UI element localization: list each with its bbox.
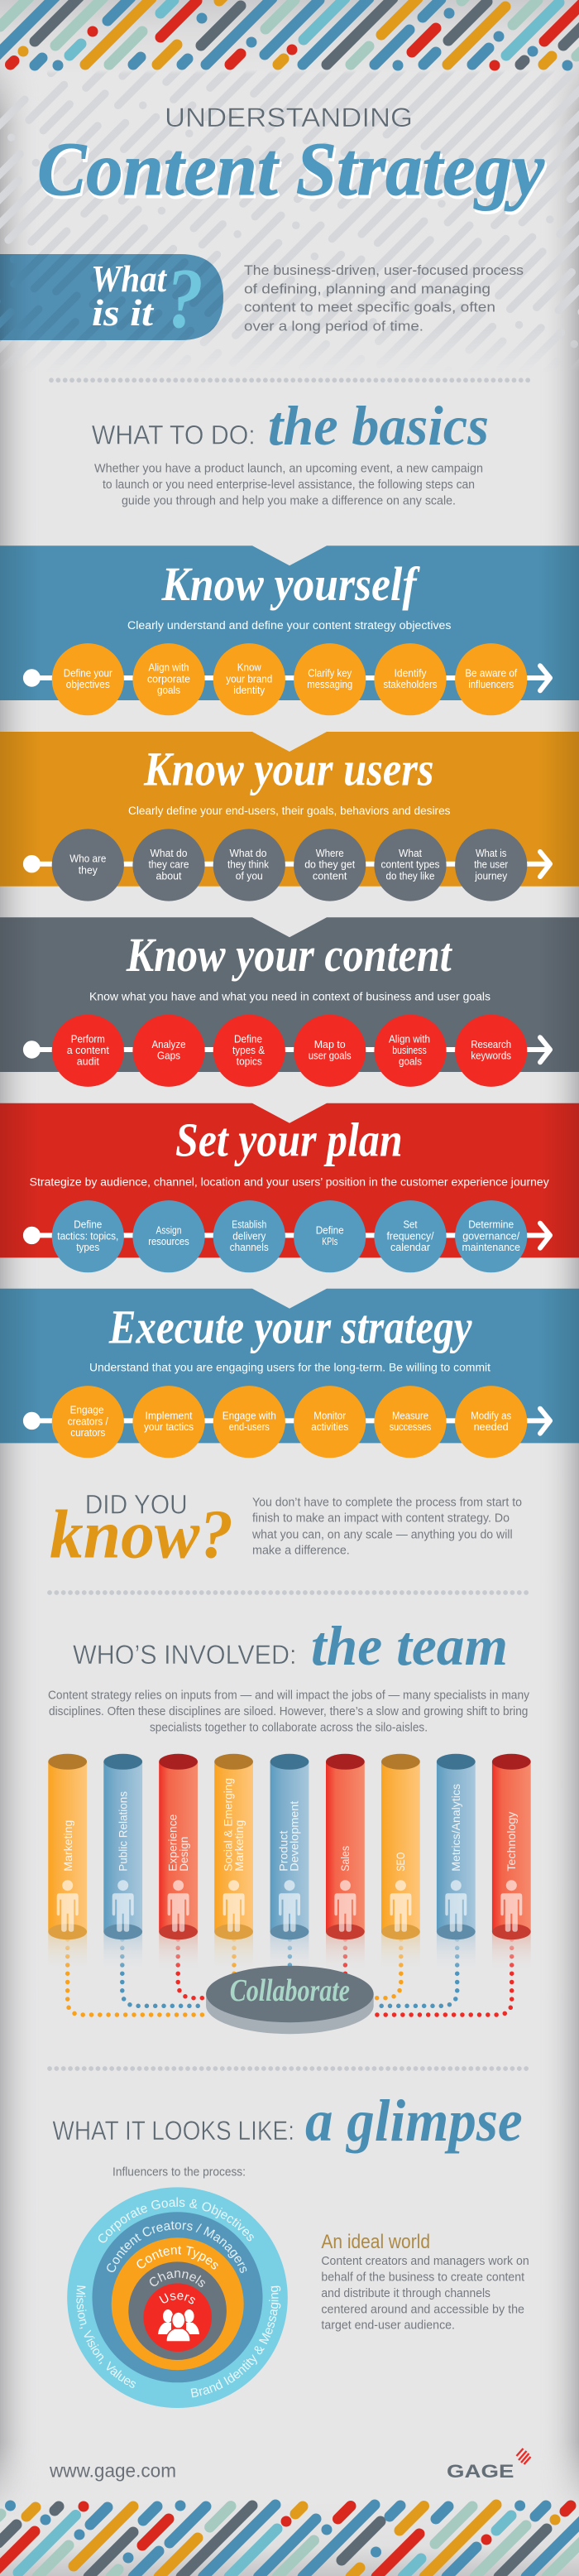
step: who are they: they: [79, 864, 98, 876]
collaborate disc: Collaborate: [230, 1973, 350, 2008]
step: where do they get content: do they get: [304, 859, 356, 871]
step: define KPIs: KPIs: [322, 1236, 337, 1247]
logo: gage: [447, 2449, 531, 2482]
step: define types and topics: [213, 1015, 285, 1087]
step: what is the user journey: What is: [476, 848, 506, 859]
ideal world text: Content creators and managers work on: [321, 2254, 529, 2268]
step: monitor activities: [294, 1386, 366, 1458]
band background: [0, 732, 579, 887]
step: what is the user journey: journey: [474, 870, 508, 882]
step: define your objectives: objectives: [66, 679, 110, 690]
icon: users: [158, 2309, 199, 2342]
title: Understanding: UNDERSTANDING: [165, 103, 413, 132]
step: analyze gaps: Gaps: [157, 1050, 180, 1062]
subheading: Know what you have and what you need in context of business and user goals: [89, 990, 490, 1002]
ideal world text: and distribute it through channels: [321, 2286, 490, 2300]
step: know your brand identity: [213, 643, 285, 715]
silo: product development: Development: [288, 1801, 301, 1872]
step: define your objectives: [52, 643, 124, 715]
band background: [0, 917, 579, 1072]
definition text: The business-driven, user-focused process: [244, 263, 524, 278]
ring label: corporate goals and objectives: Corporate Goals & Objectives: [98, 2197, 254, 2243]
step: establish delivery channels: [213, 1200, 285, 1272]
step: what do they think of you: they think: [227, 859, 270, 871]
subheading: Strategize by audience, channel, location and your users’ position in the customer experience journey: [30, 1176, 549, 1189]
silo: product development: Product: [276, 1831, 290, 1872]
step: clarify key messaging: Clarify key: [308, 667, 352, 679]
heading: what it looks like, a glimpse: a glimpse: [305, 2088, 523, 2154]
logo: gage: GAGE: [447, 2461, 514, 2482]
step: modify as needed: needed: [474, 1421, 509, 1433]
step: engage with end-users: [213, 1386, 285, 1458]
step: set frequency calendar: [374, 1200, 447, 1272]
heading: what it looks like, a glimpse: [52, 2088, 523, 2154]
ring label: mission, vision, values: Mission, Vision, Values: [76, 2285, 136, 2388]
step: perform a content audit: Perform: [71, 1033, 105, 1045]
silo: social and emerging marketing: Marketing: [232, 1820, 246, 1872]
ideal world text: target end-user audience.: [321, 2319, 455, 2333]
step: define KPIs: [294, 1200, 366, 1272]
step: research keywords: [455, 1015, 527, 1087]
step: what content types do they like: What: [399, 848, 422, 859]
step: define your objectives: Define your: [64, 667, 112, 679]
silo: public relations: [103, 1754, 142, 1973]
definition text: content to meet specific goals, often: [244, 300, 495, 315]
step: where do they get content: [294, 829, 366, 901]
step: identify stakeholders: stakeholders: [384, 679, 437, 690]
panel: know yourself: [0, 545, 579, 715]
step: align with corporate goals: [132, 643, 205, 715]
timeline arrow: [26, 1037, 550, 1062]
step: what content types do they like: do they like: [385, 870, 435, 882]
step: set frequency calendar: calendar: [390, 1242, 430, 1253]
step: implement your tactics: Implement: [146, 1410, 193, 1421]
team paragraph: [48, 1689, 529, 1735]
step: know your brand identity: Know: [237, 662, 262, 674]
heading: what to do, the basics: the basics: [268, 394, 489, 457]
silo: SEO: [381, 1754, 420, 1973]
timeline arrow: [26, 852, 550, 877]
step: be aware of influencers: Be aware of: [465, 667, 518, 679]
silo: marketing: Marketing: [61, 1820, 74, 1872]
step: engage creators curators: curators: [70, 1427, 105, 1439]
heading: who's involved, the team: [73, 1614, 508, 1677]
step: clarify key messaging: messaging: [307, 679, 352, 690]
step: map to user goals: user goals: [309, 1050, 352, 1062]
step: align with corporate goals: Align with: [149, 662, 189, 674]
step: identify stakeholders: [374, 643, 447, 715]
step: what do they think of you: of you: [236, 870, 263, 882]
step: perform a content audit: audit: [77, 1056, 99, 1068]
intro paragraph: guide you through and help you make a difference on any scale.: [122, 494, 456, 507]
influencers label: Influencers to the process:: [112, 2165, 246, 2179]
step: align with corporate goals: corporate: [147, 673, 190, 685]
step: who are they: Who are: [69, 853, 106, 865]
connector: dotted paths to collaborate: [68, 1939, 512, 2015]
ideal world heading: An ideal world: [321, 2231, 430, 2253]
heading: what it looks like, a glimpse: WHAT IT LOOKS LIKE:: [52, 2116, 294, 2146]
heading: who's involved, the team: the team: [311, 1614, 508, 1677]
silo: marketing: [48, 1754, 87, 1973]
title: Content Strategy: Content Strategy: [37, 127, 545, 211]
step: what do they care about: What do: [151, 848, 188, 859]
step: define tactics: Define: [74, 1219, 102, 1231]
step: what content types do they like: [374, 829, 447, 901]
step: modify as needed: Modify as: [471, 1410, 511, 1421]
step: define tactics: [52, 1200, 124, 1272]
step: align with corporate goals: goals: [157, 685, 180, 696]
step: assign resources: [132, 1200, 205, 1272]
step: modify as needed: [455, 1386, 527, 1458]
step: where do they get content: Where: [316, 848, 344, 859]
silo: experience design: Experience: [165, 1814, 179, 1872]
intro paragraph: [94, 463, 483, 507]
panel: what is it: [0, 251, 524, 346]
heading: Execute your strategy: [108, 1300, 472, 1354]
did you know heading: know?: [50, 1497, 233, 1574]
step: align with business goals: goals: [399, 1056, 422, 1068]
step: define tactics: types: [76, 1242, 99, 1253]
panel: set your plan: [0, 1103, 579, 1272]
step: research keywords: keywords: [471, 1050, 511, 1062]
timeline arrow: [26, 666, 550, 690]
did you know heading: DID YOU: [85, 1489, 188, 1519]
step: establish delivery channels: channels: [230, 1242, 269, 1253]
footer url: www.gage.com: [49, 2460, 176, 2482]
panel: know your content: [0, 917, 579, 1087]
heading: what to do, the basics: [92, 394, 489, 457]
definition text: of defining, planning and managing: [244, 281, 490, 296]
step: define tactics: tactics: topics,: [57, 1230, 118, 1242]
chart: silo cylinders and collaborate connections: [48, 1754, 531, 2034]
ring label: channels: Channels: [149, 2271, 205, 2287]
silo: experience design: Design: [177, 1837, 190, 1872]
step: what is the user journey: [455, 829, 527, 901]
step: perform a content audit: a content: [67, 1045, 109, 1056]
title: Content Strategy: Content Strategy: [39, 129, 547, 214]
silo: social and emerging marketing: [214, 1754, 253, 1973]
step: what do they think of you: [213, 829, 285, 901]
step: research keywords: Research: [471, 1039, 511, 1050]
step: define KPIs: Define: [316, 1224, 344, 1236]
heading: Know yourself: [161, 557, 421, 611]
ring label: brand identity and messaging: Brand Identity & Messaging: [190, 2286, 281, 2397]
team paragraph: specialists together to collaborate across the silo-aisles.: [150, 1721, 428, 1735]
step: clarify key messaging: [294, 643, 366, 715]
ring label: users: Users: [159, 2293, 195, 2304]
what is it badge: [0, 254, 223, 340]
step: set frequency calendar: frequency/: [387, 1230, 434, 1242]
did you know text: You don’t have to complete the process from start to: [252, 1495, 522, 1509]
ring label: content types: Content Types: [136, 2246, 218, 2270]
step: determine governance maintenance: maintenance: [462, 1242, 520, 1253]
panel: know your users: [0, 732, 579, 901]
top stripes decoration: [0, 0, 579, 65]
step: measure successes: successes: [390, 1421, 431, 1433]
ideal world text: behalf of the business to create content: [321, 2270, 525, 2284]
step: what is the user journey: the user: [474, 859, 508, 871]
step: map to user goals: Map to: [314, 1039, 346, 1050]
step: determine governance maintenance: Determine: [468, 1219, 514, 1231]
step: define types and topics: topics: [237, 1056, 262, 1068]
chart: concentric influencer rings: [67, 2187, 288, 2408]
silo: technology: [492, 1754, 531, 1973]
step: be aware of influencers: [455, 643, 527, 715]
ring label: content creators and managers: Content Creators / Managers: [107, 2221, 246, 2273]
subheading: Understand that you are engaging users for the long-term. Be willing to commit: [89, 1362, 490, 1374]
did you know text: finish to make an impact with content strategy. Do: [252, 1511, 510, 1526]
heading: Know your users: [143, 742, 433, 796]
step: where do they get content: content: [313, 870, 347, 882]
step: what do they care about: about: [156, 870, 182, 882]
team paragraph: Content strategy relies on inputs from — and will impact the jobs of — many specialists in many: [48, 1689, 529, 1703]
step: define types and topics: types &: [232, 1045, 266, 1056]
what is it label: is it: [92, 291, 154, 334]
step: set frequency calendar: Set: [404, 1219, 418, 1231]
timeline arrow: [26, 1409, 550, 1434]
heading: Set your plan: [175, 1113, 403, 1167]
step: who are they: [52, 829, 124, 901]
heading: what to do, the basics: WHAT TO DO:: [92, 421, 256, 450]
step: engage creators curators: [52, 1386, 124, 1458]
step: engage with end-users: Engage with: [223, 1410, 276, 1421]
silo: sales: Sales: [338, 1846, 352, 1872]
team paragraph: disciplines. Often these disciplines are siloed. However, there’s a slow and growing shift to bring: [49, 1704, 528, 1718]
heading: Know your content: [126, 928, 452, 982]
step: establish delivery channels: Establish: [232, 1219, 266, 1231]
step: engage creators curators: Engage: [69, 1405, 104, 1416]
did you know text: what you can, on any scale — anything you do will: [251, 1527, 513, 1541]
step: implement your tactics: your tactics: [144, 1421, 194, 1433]
silo: metrics and analytics: [437, 1754, 476, 1973]
step: align with business goals: business: [392, 1045, 427, 1056]
silo: technology: Technology: [505, 1812, 518, 1872]
step: establish delivery channels: delivery: [232, 1230, 266, 1242]
heading: who's involved, the team: WHO’S INVOLVED:: [73, 1640, 296, 1670]
step: measure successes: Measure: [392, 1410, 428, 1421]
step: know your brand identity: identity: [233, 685, 266, 696]
step: perform a content audit: [52, 1015, 124, 1087]
silo: SEO: SEO: [394, 1853, 407, 1872]
step: what content types do they like: content types: [380, 859, 440, 871]
background pattern of pale diagonal stripes: [0, 72, 579, 361]
ideal world text: [321, 2254, 529, 2333]
band background: [0, 1103, 579, 1257]
panel: execute your strategy: [0, 1289, 579, 1458]
step: identify stakeholders: Identify: [394, 667, 427, 679]
step: be aware of influencers: influencers: [468, 679, 514, 690]
step: what do they think of you: What do: [230, 848, 267, 859]
step: map to user goals: [294, 1015, 366, 1087]
step: what do they care about: they care: [149, 859, 189, 871]
panel: did you know: [50, 1489, 522, 1574]
step: engage with end-users: end-users: [229, 1421, 270, 1433]
panel: an ideal world: [321, 2231, 529, 2333]
silo: product development: [270, 1754, 309, 1973]
step: assign resources: resources: [148, 1236, 189, 1247]
step: monitor activities: Monitor: [313, 1410, 346, 1421]
silo: public relations: Public Relations: [116, 1791, 129, 1872]
intro paragraph: Whether you have a product launch, an upcoming event, a new campaign: [94, 463, 483, 476]
timeline arrow: [26, 1223, 550, 1248]
silo: social and emerging marketing: Social & Emerging: [221, 1778, 234, 1872]
question mark: ?: [166, 251, 203, 346]
silo: sales: [326, 1754, 365, 1973]
intro paragraph: to launch or you need enterprise-level assistance, the following steps can: [103, 478, 475, 492]
definition text: [244, 263, 524, 334]
step: what do they care about: [132, 829, 205, 901]
step: engage creators curators: creators /: [68, 1415, 108, 1427]
step: analyze gaps: Analyze: [152, 1039, 186, 1050]
did you know text: [251, 1495, 522, 1558]
step: implement your tactics: [132, 1386, 205, 1458]
step: determine governance maintenance: [455, 1200, 527, 1272]
what is it label: What: [91, 257, 167, 300]
ideal world text: centered around and accessible by the: [321, 2302, 524, 2316]
step: determine governance maintenance: governance/: [462, 1230, 520, 1242]
step: define types and topics: Define: [234, 1033, 262, 1045]
silo: experience design: [159, 1754, 198, 1973]
bottom stripes decoration: [0, 2505, 579, 2576]
definition text: over a long period of time.: [244, 319, 423, 334]
collaborate disc: [206, 1966, 374, 2034]
did you know text: make a difference.: [252, 1544, 350, 1558]
band background: [0, 1289, 579, 1443]
what is it label: [91, 257, 167, 334]
step: analyze gaps: [132, 1015, 205, 1087]
subheading: Clearly understand and define your content strategy objectives: [127, 619, 452, 632]
step: align with business goals: Align with: [389, 1033, 430, 1045]
step: know your brand identity: your brand: [226, 673, 272, 685]
step: monitor activities: activities: [311, 1421, 348, 1433]
step: measure successes: [374, 1386, 447, 1458]
step: align with business goals: [374, 1015, 447, 1087]
silo: metrics and analytics: Metrics/Analytics: [449, 1784, 462, 1872]
subheading: Clearly define your end-users, their goals, behaviors and desires: [128, 805, 451, 817]
band background: [0, 545, 579, 700]
step: assign resources: Assign: [156, 1224, 182, 1236]
